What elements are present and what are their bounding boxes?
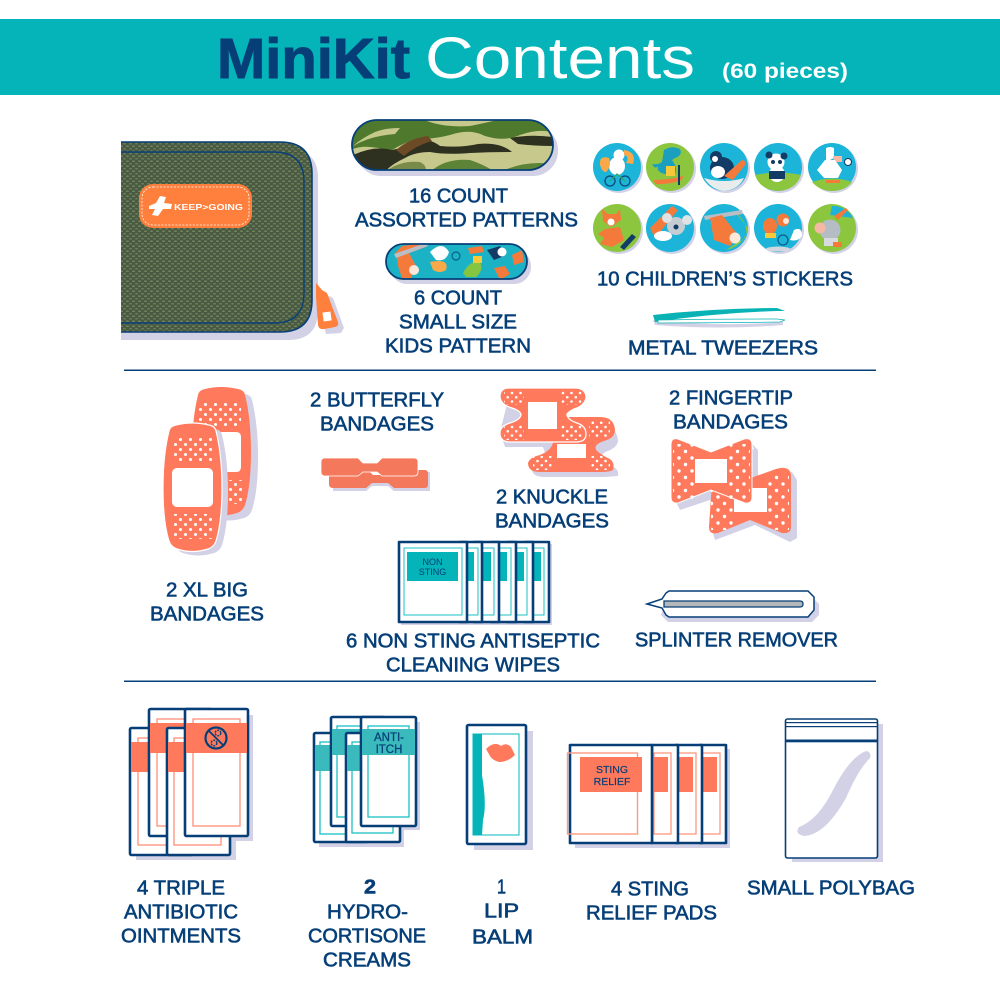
triple antibiotic ointments	[130, 709, 253, 860]
kit patch	[139, 184, 252, 228]
wipe packet front: STING	[419, 567, 446, 577]
label: bandages: BANDAGES	[673, 412, 788, 434]
butterfly bandages	[321, 458, 430, 491]
sticker: dinosaur	[646, 143, 696, 193]
wipe packet 6	[525, 542, 549, 622]
camouflage bandage	[350, 118, 558, 176]
kit case	[121, 142, 344, 340]
antiseptic wipes	[399, 542, 552, 625]
sticker: penguin	[700, 143, 750, 193]
label: assorted patterns: ASSORTED PATTERNS	[355, 210, 578, 232]
cream packet C	[346, 733, 400, 842]
title: piece count: (60 pieces)	[722, 60, 848, 83]
label: small size: SMALL SIZE	[399, 312, 517, 334]
stickers	[593, 143, 858, 254]
hydrocortisone creams	[314, 717, 420, 847]
label: 2: 2	[364, 876, 376, 898]
label: 4 triple: 4 TRIPLE	[137, 878, 225, 900]
sticker: elephant	[808, 204, 858, 254]
label: bandages: BANDAGES	[320, 414, 434, 436]
icon: lips	[486, 744, 515, 762]
label: splinter remover: SPLINTER REMOVER	[635, 630, 838, 652]
title: Contents: Contents	[425, 26, 695, 91]
sting pad front: RELIEF	[594, 776, 630, 788]
lip balm	[467, 725, 533, 850]
cream packet D	[361, 717, 416, 826]
kids pattern bandage	[385, 243, 531, 284]
label: stickers: 10 CHILDREN’S STICKERS	[597, 268, 853, 290]
title banner	[0, 19, 1000, 95]
label: hydro-: HYDRO-	[327, 902, 408, 924]
cream packet D: ANTI-	[374, 732, 404, 744]
label: cortisone: CORTISONE	[308, 926, 426, 948]
small polybag	[786, 719, 883, 862]
wipe packet front	[399, 542, 467, 622]
sticker: unicorn	[593, 143, 643, 193]
label: metal tweezers: METAL TWEEZERS	[628, 338, 818, 360]
front XL bandage	[163, 423, 228, 556]
wipe packet 3	[474, 542, 499, 622]
label: 4 sting: 4 STING	[611, 878, 689, 900]
sticker: panda	[754, 143, 804, 193]
sting pad front	[568, 745, 652, 843]
label: bandages: BANDAGES	[495, 510, 609, 532]
label: 6 count: 6 COUNT	[414, 288, 502, 310]
label: ointments: OINTMENTS	[121, 926, 241, 948]
sticker: monkey	[754, 204, 804, 254]
label: lip: LIP	[484, 900, 519, 922]
label: cleaning wipes: CLEANING WIPES	[386, 654, 560, 676]
label: kids pattern: KIDS PATTERN	[385, 336, 531, 358]
sting pad 4	[700, 745, 726, 843]
ointment packet D	[185, 709, 248, 836]
knuckle bandages	[500, 388, 618, 477]
label: creams: CREAMS	[323, 950, 411, 972]
sticker: llama	[808, 143, 858, 193]
kit patch: KEEP>GOING	[174, 202, 243, 212]
label: 2 butterfly: 2 BUTTERFLY	[310, 390, 444, 412]
sting relief pads	[568, 745, 730, 848]
label: 2 XL big: 2 XL BIG	[166, 580, 248, 602]
label: antibiotic: ANTIBIOTIC	[124, 902, 238, 924]
ointment packet C	[167, 728, 230, 855]
splinter remover	[647, 591, 819, 622]
cream packet D: ITCH	[376, 744, 402, 756]
wipe packet 4	[491, 542, 516, 622]
fingertip bandages	[671, 439, 797, 542]
wipe packet front: NON	[422, 557, 442, 567]
title: MiniKit: MiniKit	[217, 27, 410, 91]
wipe packet 2	[460, 542, 482, 622]
sting pad front: STING	[596, 764, 628, 776]
sting pad 2	[652, 745, 678, 843]
sticker: sloth	[700, 204, 750, 254]
label: 6 non sting antiseptic: 6 NON STING ANTISEPTIC	[346, 630, 600, 652]
ointment packet A	[130, 728, 193, 855]
wipe packet 5	[508, 542, 533, 622]
sticker: koala	[646, 204, 696, 254]
sting pad 3	[676, 745, 702, 843]
label: 16 count: 16 COUNT	[409, 186, 508, 208]
label: 2 fingertip: 2 FINGERTIP	[669, 388, 793, 410]
tweezers	[653, 308, 785, 328]
cream packet B	[331, 717, 385, 826]
XL big bandages	[163, 387, 258, 556]
label: balm: BALM	[472, 926, 533, 948]
label: relief pads: RELIEF PADS	[586, 902, 717, 924]
icon: no germs	[206, 728, 226, 748]
label: 2 knuckle: 2 KNUCKLE	[496, 486, 608, 508]
label: small polybag: SMALL POLYBAG	[747, 878, 915, 900]
zipper pull	[316, 283, 344, 334]
back XL bandage	[192, 387, 258, 520]
label: bandages: BANDAGES	[150, 604, 264, 626]
cream packet A	[314, 733, 368, 842]
ointment packet B	[149, 709, 212, 836]
sticker: fox	[593, 204, 643, 254]
label: 1: 1	[497, 876, 506, 898]
